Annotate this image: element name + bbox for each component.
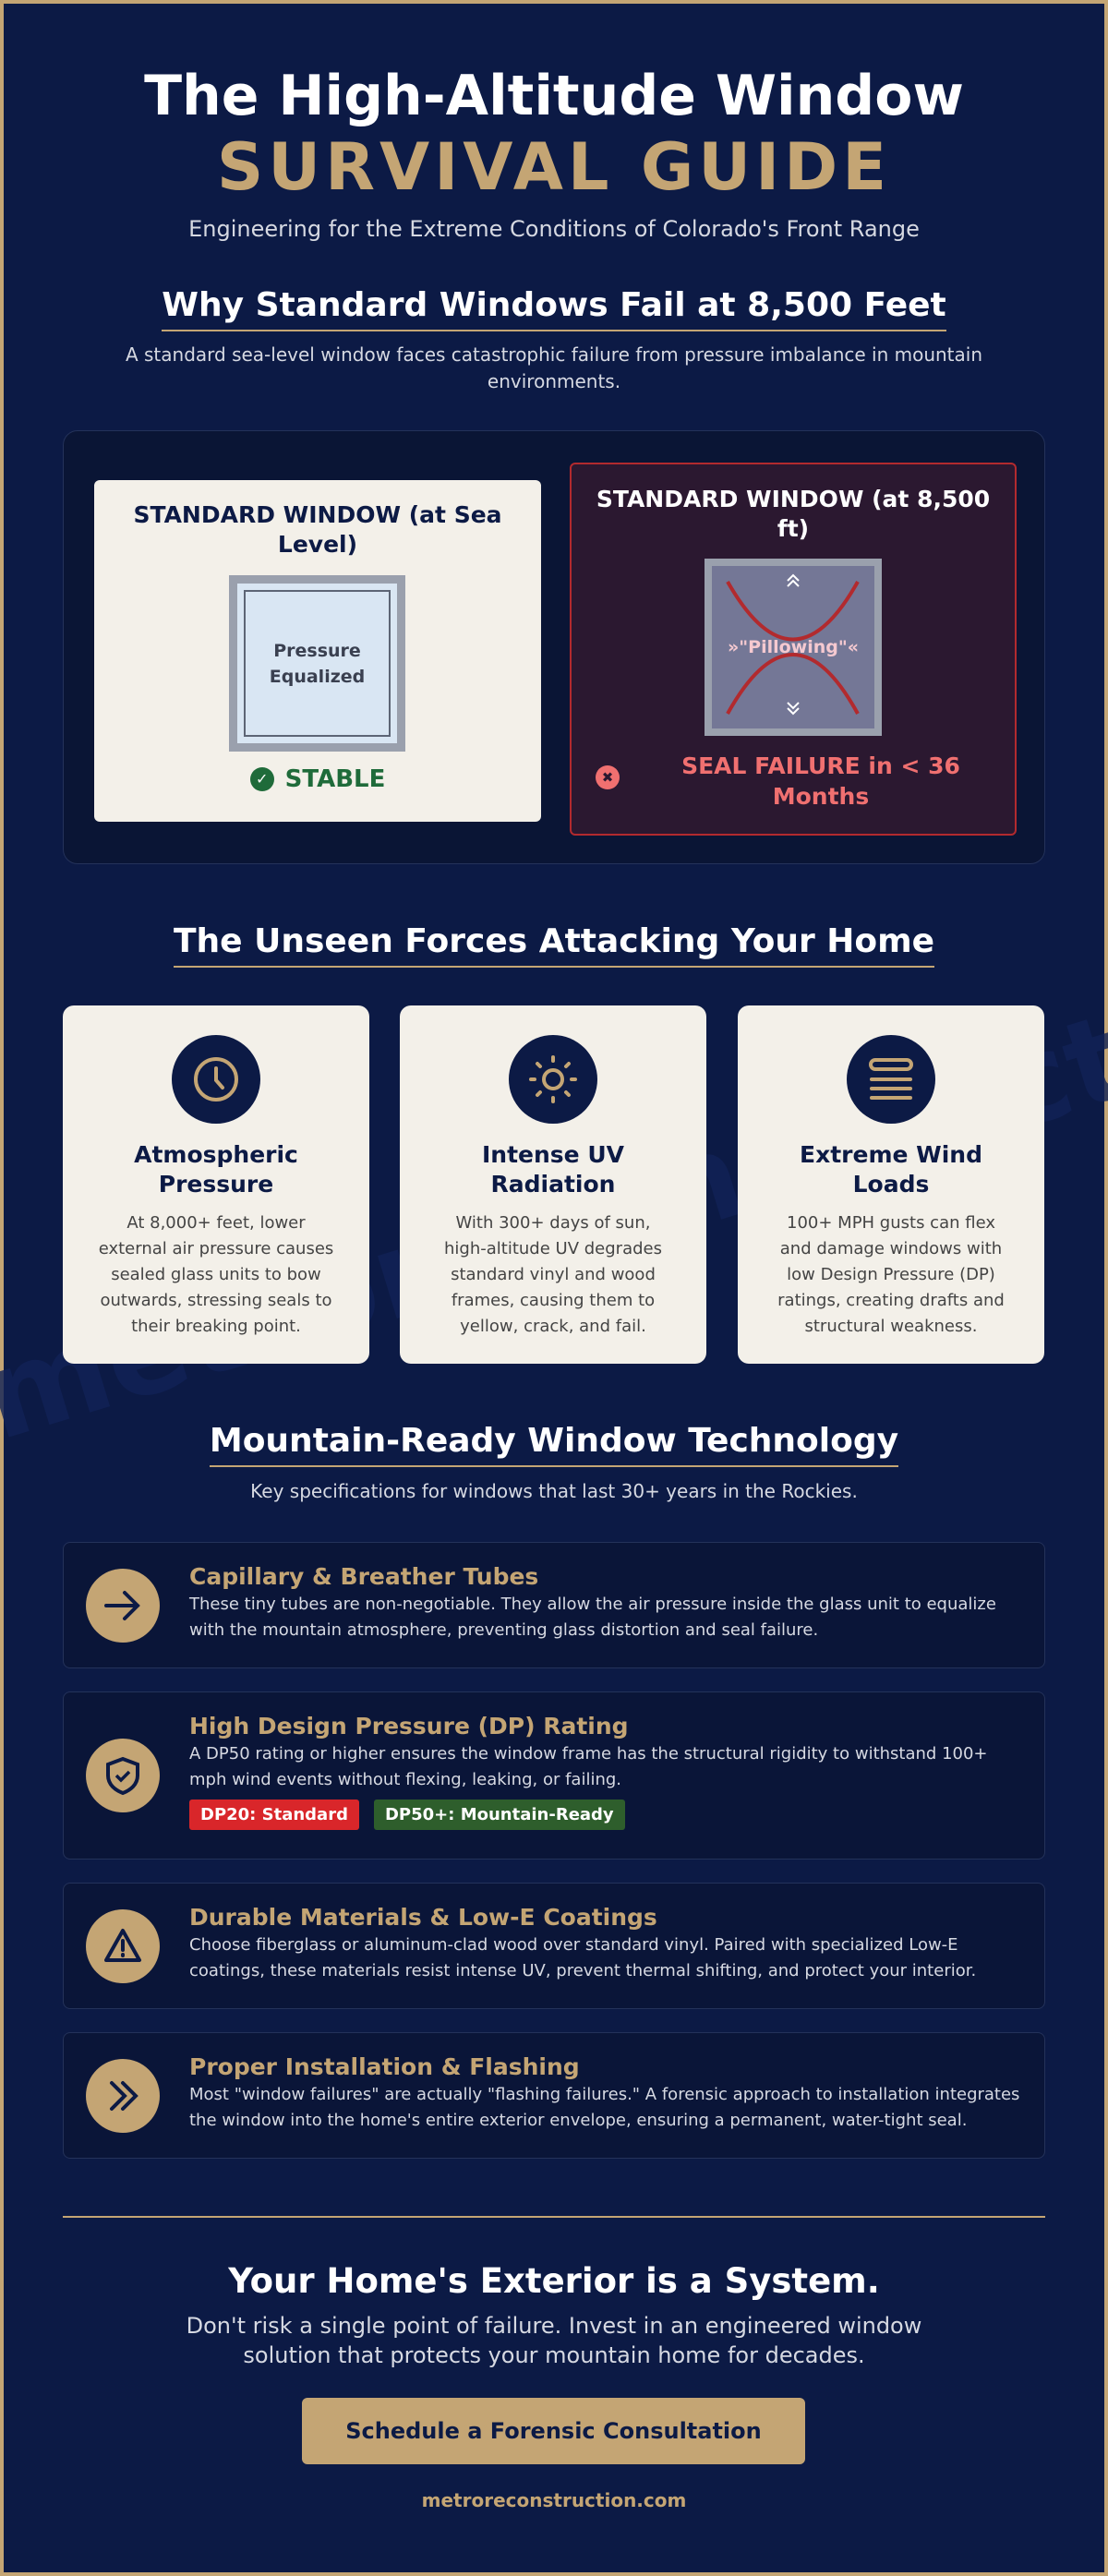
title: SURVIVAL GUIDE: [217, 129, 891, 205]
status: stable: ✓: [256, 770, 268, 788]
card: wind loads: [738, 1005, 1044, 1364]
badges: DP50+: Mountain-Ready: [385, 1805, 614, 1824]
card: wind loads: 100+ MPH gusts can flex and damage windows with low Design Pressure (DP) ratings, creating drafts and structural weakness.: [777, 1213, 1005, 1336]
status: seal failure: SEAL FAILURE in < 36: [681, 752, 960, 779]
button: [302, 2398, 805, 2464]
card: 8500 ft: ✖: [602, 769, 613, 786]
status: seal failure: Months: [773, 783, 869, 810]
card: 8500 ft: STANDARD WINDOW (at 8,500: [596, 486, 990, 512]
card: 8500 ft: ft): [777, 515, 809, 542]
panel: comparison: [63, 430, 1045, 864]
card: uv radiation: With 300+ days of sun, high-altitude UV degrades standard vinyl and wood frames, causing them to yellow, crack, and fail.: [444, 1213, 662, 1336]
button: Schedule a Forensic Consultation: [345, 2418, 762, 2444]
tech: capillary tubes: [63, 1542, 1045, 1668]
icon: arrow: [86, 1569, 160, 1643]
title: [144, 64, 964, 205]
closing text: Don't risk a single point of failure. Invest in an engineered window solution that protects your mountain home for decades.: [187, 2313, 921, 2368]
heading: mountain-ready tech: Mountain-Ready Window Technology: [210, 1422, 898, 1460]
status: seal failure: [681, 752, 960, 810]
card: sea level: STANDARD WINDOW (at Sea: [133, 501, 502, 528]
card: sea level: [94, 480, 541, 822]
tech: durable materials: Choose fiberglass or aluminum-clad wood over standard vinyl. Paired with specialized Low-E coatings, these materials resist intense UV, prevent thermal shifting, and protect your interior.: [189, 1935, 976, 1980]
tech: installation: Most "window failures" are actually "flashing failures." A forensic approach to installation integrates the window into the home's entire exterior envelope, ensuring a permanent, water-tight seal.: [189, 2085, 1019, 2130]
icon: wind: [847, 1035, 935, 1124]
heading: why fail: Why Standard Windows Fail at 8,500 Feet: [162, 286, 946, 324]
tech: DP rating: High Design Pressure (DP) Rating: [189, 1713, 629, 1739]
tech: DP rating: [63, 1691, 1045, 1860]
icon: chevrons: [86, 2059, 160, 2133]
closing heading: Your Home's Exterior is a System.: [228, 2261, 880, 2301]
icon: sun: [509, 1035, 597, 1124]
icon: clock: [172, 1035, 260, 1124]
card: uv radiation: Intense UV Radiation: [482, 1141, 624, 1198]
icon: pillowing window: [705, 559, 882, 736]
card: sea level: Level): [278, 531, 357, 558]
icon: shield: [86, 1739, 160, 1812]
tech: durable materials: [63, 1883, 1045, 2009]
icon: equalized window: [229, 575, 405, 752]
icon: equalized window: Pressure: [273, 641, 361, 661]
status: stable: STABLE: [285, 765, 385, 793]
badges: [189, 1800, 625, 1830]
card: atmospheric pressure: Atmospheric Pressure: [134, 1141, 298, 1198]
tech: installation: [63, 2032, 1045, 2159]
card: uv radiation: [400, 1005, 706, 1364]
intro text: A standard sea-level window faces catastrophic failure from pressure imbalance in mountain environments.: [126, 343, 982, 392]
icon: warning: [86, 1909, 160, 1983]
badges: DP20: Standard: [200, 1805, 348, 1824]
tech: capillary tubes: These tiny tubes are non-negotiable. They allow the air pressure inside the glass unit to equalize with the mountain atmosphere, preventing glass distortion and seal failure.: [189, 1595, 996, 1640]
tech: installation: Proper Installation & Flashing: [189, 2053, 580, 2080]
heading: unseen forces: The Unseen Forces Attacking Your Home: [174, 922, 934, 960]
icon: equalized window: Equalized: [270, 667, 365, 687]
url: metroreconstruction.com: [422, 2489, 686, 2511]
card: atmospheric pressure: At 8,000+ feet, lower external air pressure causes sealed glass units to bow outwards, stressing seals to their breaking point.: [99, 1213, 333, 1336]
tech: DP rating: A DP50 rating or higher ensures the window frame has the structural rigidity to withstand 100+ mph wind events without flexing, leaking, or failing.: [189, 1744, 988, 1789]
tech: capillary tubes: Capillary & Breather Tubes: [189, 1563, 538, 1590]
tech: durable materials: Durable Materials & Low-E Coatings: [189, 1904, 657, 1931]
subheading: Key specifications for windows that last 30+ years in the Rockies.: [250, 1480, 858, 1502]
subtitle: Engineering for the Extreme Conditions of Colorado's Front Range: [188, 216, 920, 242]
card: atmospheric pressure: [63, 1005, 369, 1364]
icon: pillowing window: »"Pillowing"«: [728, 637, 859, 657]
card: 8500 ft: [570, 463, 1017, 836]
card: wind loads: Extreme Wind Loads: [800, 1141, 982, 1198]
title: The High-Altitude Window: [144, 64, 964, 128]
